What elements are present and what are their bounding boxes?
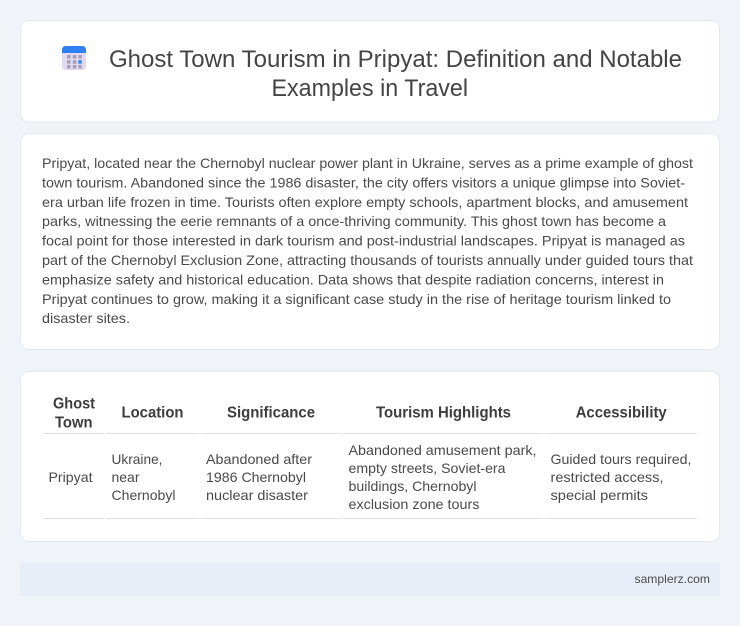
footer credit: samplerz.com [634, 572, 710, 586]
text block: description [42, 155, 693, 326]
table data row: near [112, 469, 140, 485]
footer bar [20, 562, 720, 596]
table data row: Ukraine, [112, 451, 162, 467]
table data row: Pripyat [48, 469, 93, 485]
panel: table card [20, 372, 720, 542]
table data row: nuclear disaster [206, 487, 308, 503]
text block: description: era urban life frozen in time. Tourists often explore empty schools, apartment blocks, and amusement [42, 194, 688, 210]
title [109, 46, 682, 102]
table data row: buildings, Chernobyl [348, 478, 476, 494]
table header row [53, 396, 667, 432]
text block: description: focal point for those interested in dark tourism and post-industrial landscapes. Pripyat is managed as [42, 233, 685, 249]
title: Examples in Travel [272, 75, 468, 102]
text block: description: part of the Chernobyl Exclusion Zone, attracting thousands of tourists annually under guided tours that [42, 252, 693, 268]
text block: description: disaster sites. [42, 310, 130, 326]
text block: description: Pripyat continues to grow, making it a significant case study in the rise of heritage tourism linked to [42, 291, 671, 307]
table data row: special permits [550, 487, 648, 503]
text block: description: Pripyat, located near the Chernobyl nuclear power plant in Ukraine, serves as a prime example of ghost [42, 155, 693, 171]
table header row: Location [122, 404, 184, 422]
table data row: 1986 Chernobyl [206, 469, 306, 485]
table data row: Abandoned after [206, 451, 312, 467]
table header row: Tourism Highlights [376, 404, 511, 422]
table header row: Accessibility [576, 404, 667, 422]
panel: description card [20, 134, 720, 350]
text block: description: emphasize safety and historical education. Data shows that despite radiation concerns, interest in [42, 271, 664, 287]
title: Ghost Town Tourism in Pripyat: Definition and Notable [109, 46, 682, 73]
table data row: Abandoned amusement park, [348, 442, 536, 458]
table header row: Ghost [53, 396, 96, 412]
table header row: Town [55, 414, 92, 432]
panel: title card [20, 20, 720, 122]
text block: description: town tourism. Abandoned since the 1986 disaster, the city offers visitors a unique glimpse into Soviet- [42, 174, 685, 190]
table header row: Significance [227, 404, 315, 422]
icon: calendar [62, 46, 86, 70]
table data row: Guided tours required, [550, 451, 692, 467]
text block: description: parks, witnessing the eerie remnants of a once-thriving community. This ghost town has become a [42, 213, 666, 229]
table data row: Chernobyl [112, 487, 176, 503]
table data row [48, 442, 692, 512]
table data row: restricted access, [550, 469, 664, 485]
table data row: empty streets, Soviet-era [348, 460, 506, 476]
table data row: exclusion zone tours [348, 496, 480, 512]
